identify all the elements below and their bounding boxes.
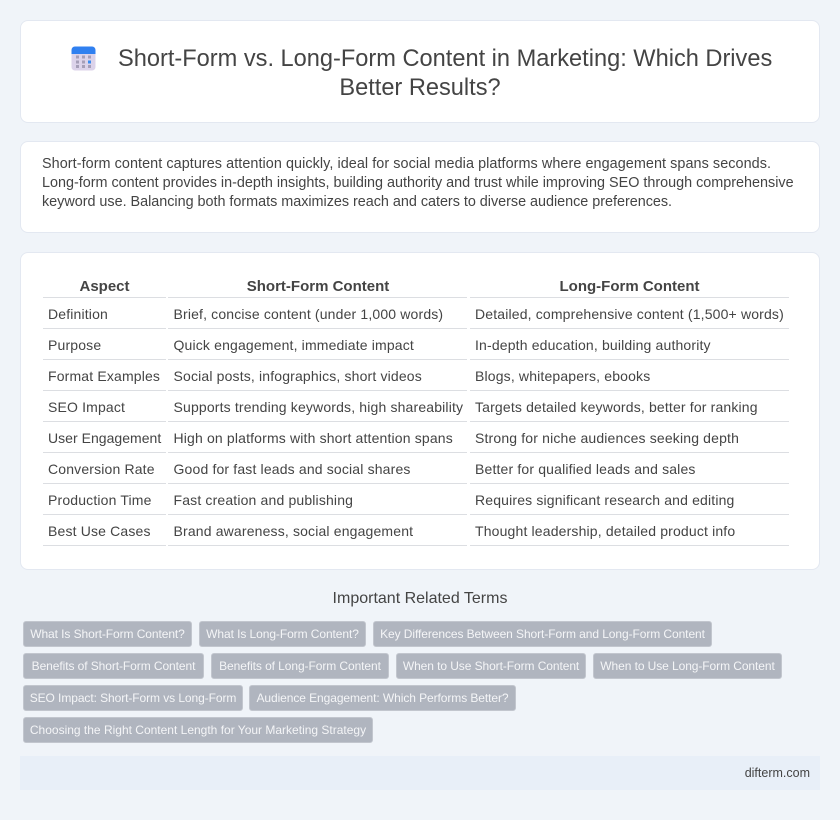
intro paragraph: [42, 156, 794, 210]
table header: Short-Form Content: [247, 278, 389, 294]
row: format examples: Social posts, infographics, short videos: [174, 368, 422, 384]
intro paragraph: Short-form content captures attention quickly, ideal for social media platforms where engagement spans seconds.: [42, 156, 771, 172]
related terms tags: When to Use Long-Form Content: [600, 659, 775, 673]
row: seo impact: [43, 399, 789, 422]
row: definition: Brief, concise content (under 1,000 words): [174, 306, 443, 322]
title: [118, 46, 772, 101]
table header: [43, 278, 789, 298]
row: user engagement: High on platforms with short attention spans: [174, 430, 453, 446]
footer bar: [20, 756, 820, 790]
related terms heading: Important Related Terms: [333, 590, 507, 607]
row: format examples: [43, 368, 789, 391]
row: seo impact: Targets detailed keywords, better for ranking: [475, 399, 758, 415]
table header: Aspect: [79, 278, 130, 294]
row: format examples: Format Examples: [48, 368, 160, 384]
row: purpose: [43, 337, 789, 360]
row: user engagement: [43, 430, 789, 453]
comparison table panel: [20, 252, 820, 570]
row: production time: Fast creation and publishing: [174, 492, 353, 508]
related terms tags: Audience Engagement: Which Performs Better?: [256, 691, 509, 705]
related terms tags: SEO Impact: Short-Form vs Long-Form: [30, 691, 236, 705]
footer source: difterm.com: [745, 766, 810, 780]
title: Better Results?: [339, 75, 501, 101]
title: Short-Form vs. Long-Form Content in Marketing: Which Drives: [118, 46, 772, 72]
related terms tags: [23, 621, 782, 743]
related terms tags: Key Differences Between Short-Form and Long-Form Content: [380, 627, 705, 641]
related terms tags: Benefits of Long-Form Content: [219, 659, 381, 673]
row: best use cases: Best Use Cases: [48, 523, 151, 539]
related terms tags: What Is Short-Form Content?: [30, 627, 185, 641]
row: conversion rate: Conversion Rate: [48, 461, 155, 477]
row: definition: Definition: [48, 306, 108, 322]
related terms tags: When to Use Short-Form Content: [403, 659, 579, 673]
row: seo impact: SEO Impact: [48, 399, 125, 415]
row: seo impact: Supports trending keywords, high shareability: [174, 399, 463, 415]
row: format examples: Blogs, whitepapers, ebooks: [475, 368, 650, 384]
row: production time: Requires significant research and editing: [475, 492, 734, 508]
row: production time: [43, 492, 789, 515]
intro paragraph: Long-form content provides in-depth insights, building authority and trust while improving SEO through comprehensive: [42, 175, 794, 191]
row: definition: [43, 306, 789, 329]
row: purpose: Purpose: [48, 337, 101, 353]
icon: calendar: [72, 46, 96, 70]
related terms tags: What Is Long-Form Content?: [206, 627, 359, 641]
row: best use cases: Brand awareness, social engagement: [174, 523, 413, 539]
row: production time: Production Time: [48, 492, 152, 508]
row: best use cases: Thought leadership, detailed product info: [475, 523, 735, 539]
row: user engagement: User Engagement: [48, 430, 161, 446]
row: purpose: Quick engagement, immediate impact: [174, 337, 414, 353]
row: purpose: In-depth education, building authority: [475, 337, 711, 353]
row: definition: Detailed, comprehensive content (1,500+ words): [475, 306, 784, 322]
intro text panel: [20, 141, 820, 233]
header panel: [20, 20, 820, 123]
row: user engagement: Strong for niche audiences seeking depth: [475, 430, 739, 446]
row: conversion rate: [43, 461, 789, 484]
row: best use cases: [43, 523, 789, 546]
row: conversion rate: Better for qualified leads and sales: [475, 461, 696, 477]
related terms tags: Choosing the Right Content Length for Your Marketing Strategy: [30, 723, 366, 737]
intro paragraph: keyword use. Balancing both formats maximizes reach and caters to diverse audience preferences.: [42, 194, 672, 210]
related terms tags: Benefits of Short-Form Content: [32, 659, 195, 673]
row: conversion rate: Good for fast leads and social shares: [174, 461, 411, 477]
table header: Long-Form Content: [560, 278, 699, 294]
